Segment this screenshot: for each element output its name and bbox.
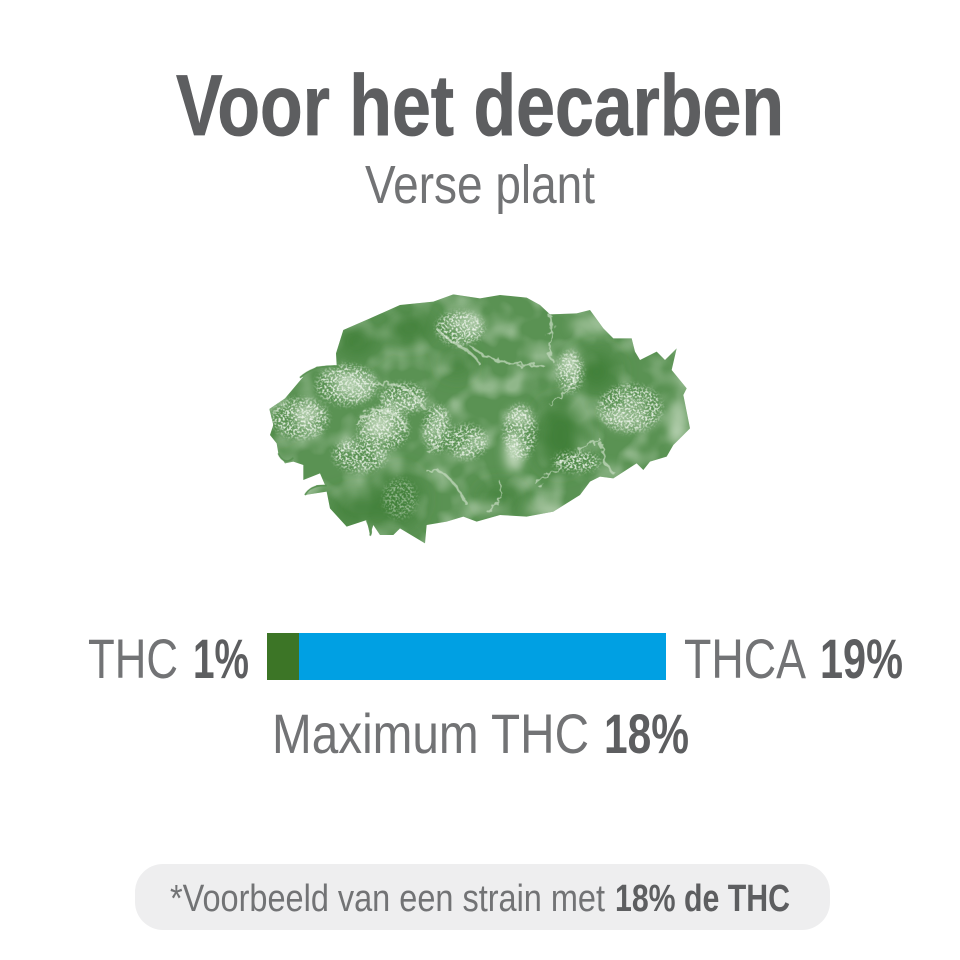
stacked bar: THC vs THCA: [267, 633, 666, 680]
label: THCA 19%: THCA: [684, 627, 807, 690]
label: THC 1%: THC: [88, 627, 178, 690]
label: THCA 19%: 19%: [820, 627, 903, 690]
footnote pill: 18% de THC: [615, 878, 790, 920]
label: Maximum THC 18%: 18%: [604, 702, 689, 765]
label: THCA 19%: [684, 627, 903, 690]
label: Maximum THC 18%: Maximum THC: [272, 702, 589, 765]
illustration: green cannabis bud: [269, 294, 690, 544]
infographic canvas: [89, 72, 902, 930]
title: Voor het decarben: [176, 58, 784, 154]
subtitle: Verse plant: [365, 155, 595, 215]
label: THC 1%: 1%: [193, 627, 249, 690]
leaf tendrils: [278, 366, 371, 536]
footnote pill: *Voorbeeld van een strain met: [170, 878, 605, 920]
footnote pill: [135, 864, 830, 930]
